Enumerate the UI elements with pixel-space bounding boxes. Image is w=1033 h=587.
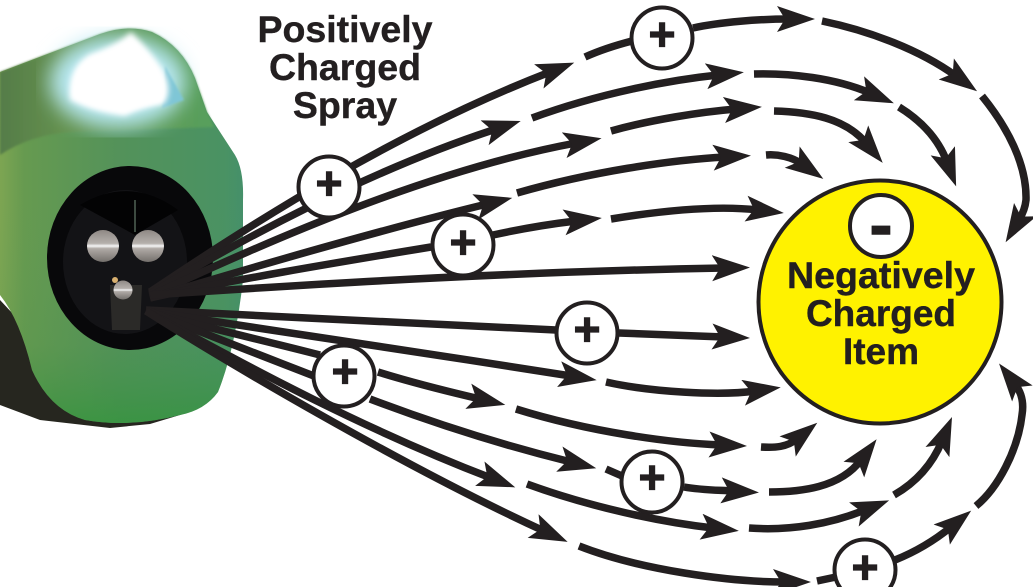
field line 8	[146, 311, 755, 393]
positive charge 6	[622, 451, 682, 512]
positive charge 4	[556, 302, 618, 364]
negative charge: -	[869, 185, 893, 265]
item label	[787, 255, 975, 372]
spray label: Spray	[293, 84, 397, 126]
positive charge 4: +	[574, 303, 600, 355]
field line 3	[150, 109, 866, 296]
spray label	[257, 8, 433, 126]
field line 12 (lower outer)	[146, 311, 1023, 582]
item label: Negatively	[787, 255, 975, 296]
positive charge 5	[314, 345, 374, 406]
positive charge 1	[298, 156, 360, 218]
field line 2	[150, 74, 947, 294]
field line 7	[146, 310, 724, 337]
field line 4	[150, 155, 802, 298]
positive charge 3: +	[450, 216, 476, 268]
positive charge 6: +	[639, 451, 665, 503]
negatively charged item	[758, 180, 1002, 424]
field line 1 (upper outer)	[150, 19, 1026, 292]
positive charge 7	[834, 540, 896, 587]
negative charge	[850, 185, 912, 265]
item label: Item	[843, 331, 919, 372]
positive charge 3	[432, 214, 494, 276]
field line 5	[150, 208, 758, 298]
field line 11	[146, 311, 942, 529]
spray label: Positively	[257, 8, 433, 50]
spray label: Charged	[269, 46, 421, 88]
electrode right	[132, 230, 164, 262]
field line 6	[150, 268, 724, 295]
nozzle	[47, 166, 213, 350]
positive charge 2: +	[649, 8, 675, 60]
screw	[114, 280, 132, 300]
field line 10	[146, 310, 861, 492]
item label: Charged	[806, 293, 956, 334]
sprayer device	[0, 28, 243, 428]
positive charge 2	[632, 8, 692, 68]
positive charge 1: +	[316, 157, 342, 209]
top housing	[0, 28, 214, 155]
positive charge 5: +	[332, 345, 358, 397]
field line 9	[146, 311, 797, 447]
electrode left	[87, 230, 119, 262]
flashlight glow	[50, 32, 186, 128]
